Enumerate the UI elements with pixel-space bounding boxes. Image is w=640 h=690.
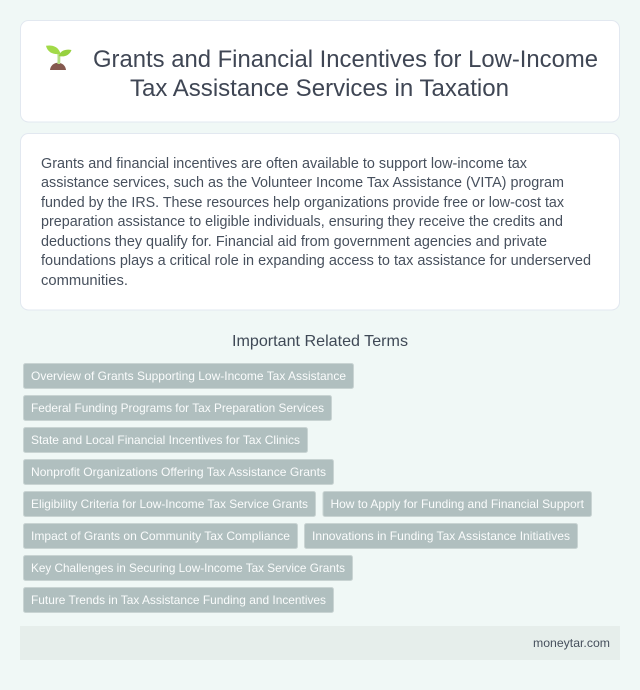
tag: How to Apply for Funding and Financial Support bbox=[330, 497, 585, 511]
tags: related terms bbox=[24, 364, 592, 612]
text block: description: assistance services, such as the Volunteer Income Tax Assistance (VITA) program bbox=[41, 175, 564, 191]
text block: description: Grants and financial incentives are often available to support low-income tax bbox=[41, 156, 528, 172]
tag bbox=[323, 492, 592, 516]
panel: description bbox=[20, 134, 620, 310]
text block: description bbox=[41, 156, 591, 289]
text block: description: communities. bbox=[41, 273, 128, 289]
tag: Key Challenges in Securing Low-Income Tax Service Grants bbox=[31, 561, 345, 575]
tag: Future Trends in Tax Assistance Funding and Incentives bbox=[31, 593, 326, 607]
icon: seedling bbox=[46, 45, 72, 70]
tag bbox=[24, 364, 354, 388]
tag bbox=[24, 460, 334, 484]
text block: description: preparation assistance to eligible individuals, ensuring they receive the credits and bbox=[41, 214, 563, 230]
tag: Eligibility Criteria for Low-Income Tax Service Grants bbox=[31, 497, 308, 511]
title: Grants and Financial Incentives for Low-Income bbox=[93, 46, 598, 73]
footer: source: moneytar.com bbox=[533, 636, 610, 650]
tag bbox=[24, 492, 316, 516]
tag bbox=[24, 428, 308, 452]
tag: Nonprofit Organizations Offering Tax Assistance Grants bbox=[31, 465, 326, 479]
heading: related terms: Important Related Terms bbox=[232, 333, 408, 350]
text block: description: funded by the IRS. These resources help organizations provide free or low-cost tax bbox=[41, 195, 565, 211]
tag: Federal Funding Programs for Tax Preparation Services bbox=[31, 401, 324, 415]
tag bbox=[24, 396, 332, 420]
tag: Overview of Grants Supporting Low-Income Tax Assistance bbox=[31, 369, 346, 383]
tag bbox=[24, 524, 298, 548]
text block: description: deductions they qualify for. Financial aid from government agencies and private bbox=[41, 234, 547, 250]
title bbox=[93, 46, 598, 102]
tag: Impact of Grants on Community Tax Compliance bbox=[31, 529, 290, 543]
tag bbox=[24, 588, 334, 612]
tag: Innovations in Funding Tax Assistance Initiatives bbox=[312, 529, 570, 543]
footer bbox=[20, 626, 620, 660]
panel: header bbox=[20, 20, 620, 122]
tag bbox=[304, 524, 578, 548]
tag bbox=[24, 556, 352, 580]
title: Tax Assistance Services in Taxation bbox=[130, 75, 509, 102]
text block: description: foundations plays a critical role in expanding access to tax assistance for underserved bbox=[41, 253, 591, 269]
tag: State and Local Financial Incentives for Tax Clinics bbox=[31, 433, 300, 447]
